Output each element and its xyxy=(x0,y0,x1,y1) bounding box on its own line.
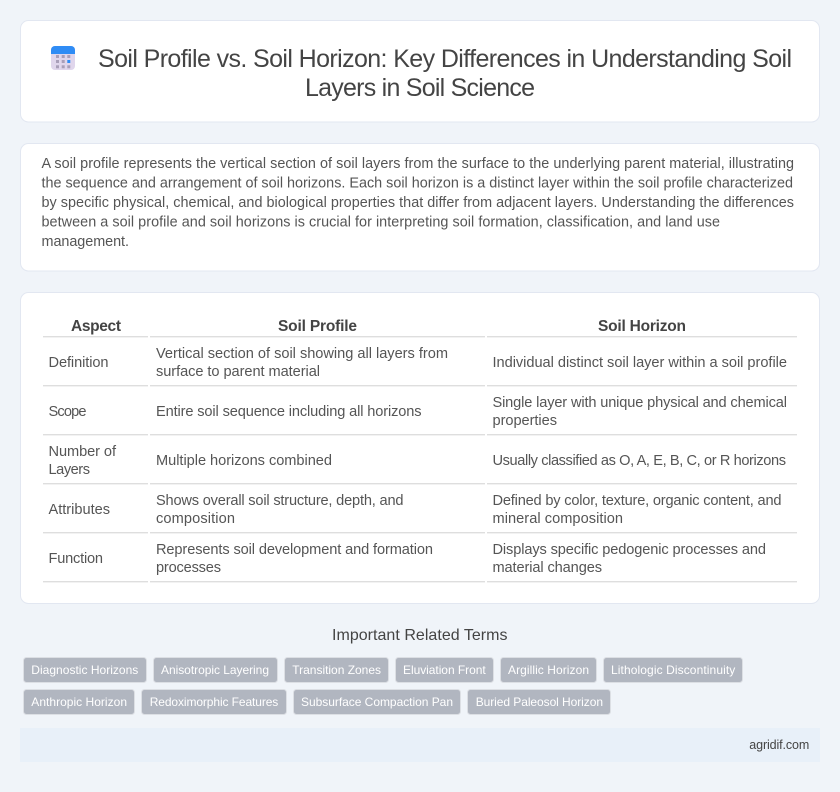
tag: anisotropic layering xyxy=(154,658,278,682)
tag: eluviation front: Eluviation Front xyxy=(403,663,486,677)
footer xyxy=(20,728,820,762)
title xyxy=(98,45,792,102)
tag: anisotropic layering: Anisotropic Layering xyxy=(161,663,269,677)
tag: subsurface compaction pan: Subsurface Compaction Pan xyxy=(301,695,453,709)
table header: Aspect xyxy=(71,318,121,335)
row: number of layers xyxy=(48,444,786,478)
tag: buried paleosol horizon xyxy=(468,690,610,714)
intro text block: A soil profile represents the vertical section of soil layers from the surface to the underlying parent material, illustrating xyxy=(42,156,794,172)
heading: important related terms: Important Related Terms xyxy=(332,627,508,644)
row: attributes: mineral composition xyxy=(492,511,623,527)
row: number of layers: Multiple horizons combined xyxy=(156,453,332,469)
row: attributes xyxy=(48,493,782,527)
row: scope xyxy=(48,395,787,429)
intro text block: between a soil profile and soil horizons is crucial for interpreting soil formation, classification, and land use xyxy=(42,214,720,230)
title: Soil Profile vs. Soil Horizon: Key Differences in Understanding Soil xyxy=(98,45,792,73)
row: number of layers: Layers xyxy=(48,462,90,478)
panel: comparison table xyxy=(20,292,820,604)
row: scope: Entire soil sequence including all horizons xyxy=(156,404,422,420)
row: attributes: Shows overall soil structure, depth, and xyxy=(156,493,404,509)
row: definition: Individual distinct soil layer within a soil profile xyxy=(492,355,787,371)
tag: redoximorphic features: Redoximorphic Features xyxy=(150,695,278,709)
row: function: material changes xyxy=(492,560,602,576)
tag: transition zones xyxy=(284,658,388,682)
row: attributes: composition xyxy=(156,511,235,527)
intro text block xyxy=(42,156,794,250)
row: definition: Definition xyxy=(48,355,108,371)
row: number of layers: Usually classified as O, A, E, B, C, or R horizons xyxy=(492,453,786,469)
tag: diagnostic horizons: Diagnostic Horizons xyxy=(31,663,138,677)
tag: redoximorphic features xyxy=(142,690,286,714)
tag: diagnostic horizons xyxy=(24,658,146,682)
table header xyxy=(71,318,686,335)
row: attributes: Attributes xyxy=(48,502,110,518)
tag: argillic horizon: Argillic Horizon xyxy=(508,663,589,677)
icon: calendar xyxy=(51,46,75,70)
intro text block: the sequence and arrangement of soil horizons. Each soil horizon is a distinct layer within the soil profile characterized xyxy=(42,176,793,192)
table header: Soil Profile xyxy=(278,318,357,335)
tag: argillic horizon xyxy=(500,658,596,682)
tag: buried paleosol horizon: Buried Paleosol Horizon xyxy=(476,695,603,709)
tag: lithologic discontinuity xyxy=(604,658,742,682)
tag: lithologic discontinuity: Lithologic Discontinuity xyxy=(611,663,735,677)
row: function: Represents soil development and formation xyxy=(156,542,433,558)
row: attributes: Defined by color, texture, organic content, and xyxy=(492,493,782,509)
row: definition xyxy=(48,346,787,380)
row: function: processes xyxy=(156,560,221,576)
table header: Soil Horizon xyxy=(598,318,686,335)
row: function: Displays specific pedogenic processes and xyxy=(492,542,766,558)
row: scope: Scope xyxy=(48,404,86,420)
footer: agridif.com xyxy=(749,738,809,752)
row: function: Function xyxy=(48,551,103,567)
row: definition: surface to parent material xyxy=(156,364,320,380)
tag: eluviation front xyxy=(396,658,494,682)
related terms tags xyxy=(24,658,742,714)
row: number of layers: Number of xyxy=(48,444,117,460)
row: scope: Single layer with unique physical and chemical xyxy=(492,395,787,411)
row: function xyxy=(48,542,766,576)
row: definition: Vertical section of soil showing all layers from xyxy=(156,346,448,362)
tag: anthropic horizon xyxy=(24,690,134,714)
row: scope: properties xyxy=(492,413,557,429)
title: Layers in Soil Science xyxy=(305,74,535,102)
header panel xyxy=(20,20,820,122)
tag: subsurface compaction pan xyxy=(294,690,460,714)
intro text block: management. xyxy=(42,234,129,250)
tag: anthropic horizon: Anthropic Horizon xyxy=(31,695,127,709)
tag: transition zones: Transition Zones xyxy=(292,663,381,677)
panel: introduction xyxy=(20,144,820,271)
intro text block: by specific physical, chemical, and biological properties that differ from adjacent layers. Understanding the differences xyxy=(42,195,794,211)
